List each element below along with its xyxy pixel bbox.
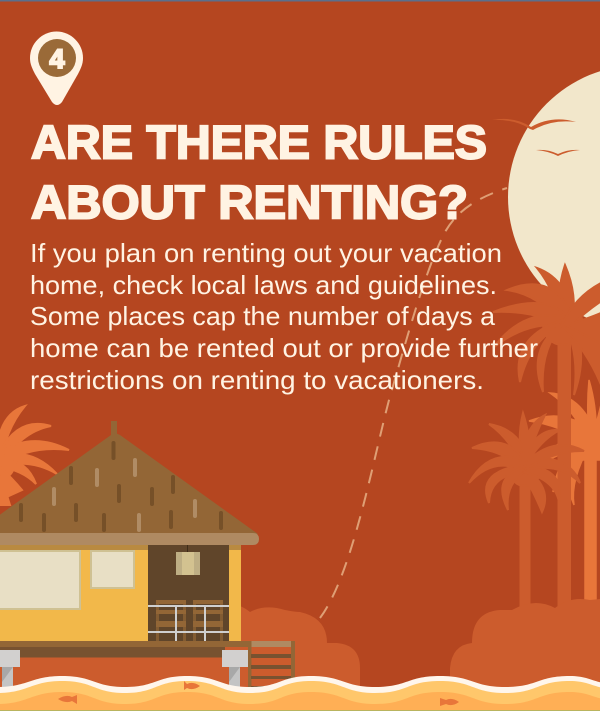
eave	[0, 533, 259, 545]
bushes right	[450, 599, 600, 690]
dashed flight path	[320, 188, 507, 618]
palm: upper right	[493, 265, 600, 610]
location pin: 4	[49, 44, 65, 74]
water	[0, 676, 600, 711]
palm: lower right	[469, 413, 584, 615]
chairs	[156, 600, 223, 642]
body text: Some places cap the number of days a	[30, 301, 496, 331]
floor	[0, 641, 252, 647]
wall	[0, 545, 241, 642]
body text: restrictions on renting to vacationers.	[30, 365, 484, 395]
sun	[508, 65, 600, 329]
palm: lighter right	[529, 370, 600, 610]
body text	[30, 238, 538, 395]
stilts	[0, 650, 248, 690]
palm: lower-left	[0, 406, 69, 505]
title	[31, 116, 487, 228]
body text: home can be rented out or provide further	[30, 333, 538, 363]
house	[0, 421, 295, 691]
thatch marks	[19, 441, 223, 532]
railing	[148, 605, 229, 642]
fish	[58, 681, 459, 706]
body text: home, check local laws and guidelines.	[30, 270, 497, 300]
small window	[91, 551, 134, 588]
roof	[0, 434, 258, 534]
location pin	[30, 32, 83, 105]
lantern	[176, 545, 200, 575]
body text: If you plan on renting out your vacation	[30, 238, 502, 268]
finial	[111, 421, 117, 435]
title: ABOUT RENTING?	[31, 176, 468, 228]
birds	[492, 119, 580, 156]
title: ARE THERE RULES	[31, 116, 487, 168]
stairs	[248, 641, 295, 691]
large window	[0, 551, 80, 609]
ground under house	[0, 640, 320, 690]
bushes left	[230, 604, 360, 690]
porch	[148, 545, 229, 642]
